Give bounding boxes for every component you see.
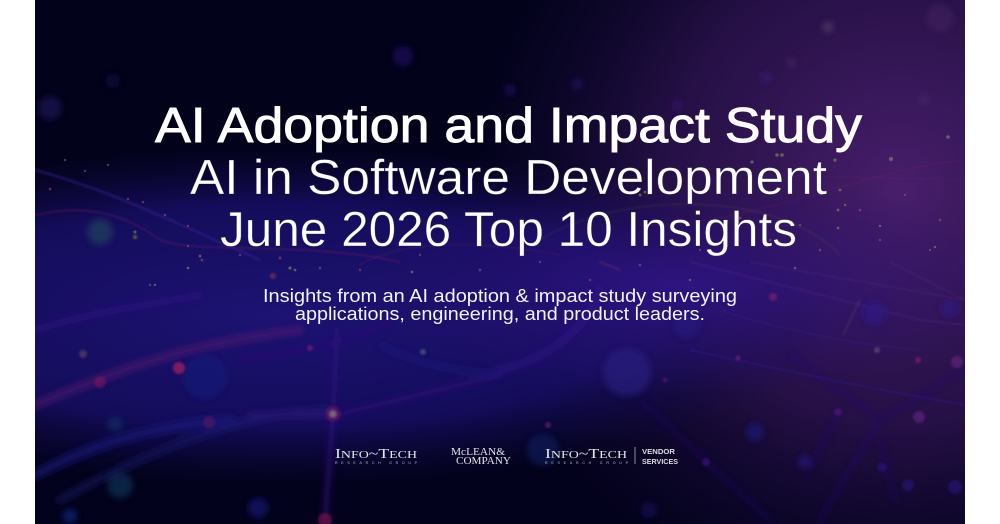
glowing nodes	[79, 235, 963, 524]
logo: Info-Tech Vendor Services: VENDOR	[642, 449, 675, 456]
logo: Info-Tech Research Group: INFO ~T ECH	[335, 447, 417, 462]
logo: Info-Tech Vendor Services: INFO ~T ECH	[545, 447, 627, 462]
logo: McLean & Company: McLEAN&	[451, 447, 505, 458]
particle dots	[49, 159, 941, 286]
logo: Info-Tech Vendor Services: SERVICES	[642, 459, 678, 466]
title line 1: AI Adoption and Impact Study	[155, 99, 863, 153]
blurred network lines	[35, 290, 965, 520]
thin network lines	[35, 160, 965, 405]
subtitle line 2: applications, engineering, and product leaders.	[295, 304, 705, 324]
logo: McLean & Company	[451, 448, 511, 464]
logos row	[335, 447, 678, 464]
title line 2: AI in Software Development	[190, 151, 827, 205]
title	[155, 99, 863, 257]
logo: Info-Tech Vendor Services	[545, 447, 678, 464]
logo: Info-Tech Research Group: RESEARCH GROUP	[335, 461, 418, 465]
logo: Info-Tech Vendor Services: RESEARCH GROUP	[545, 461, 629, 465]
subtitle	[263, 286, 737, 324]
title line 3: June 2026 Top 10 Insights	[220, 203, 797, 257]
subtitle line 1: Insights from an AI adoption & impact study surveying	[263, 286, 737, 306]
logo: McLean & Company: COMPANY	[456, 455, 511, 467]
